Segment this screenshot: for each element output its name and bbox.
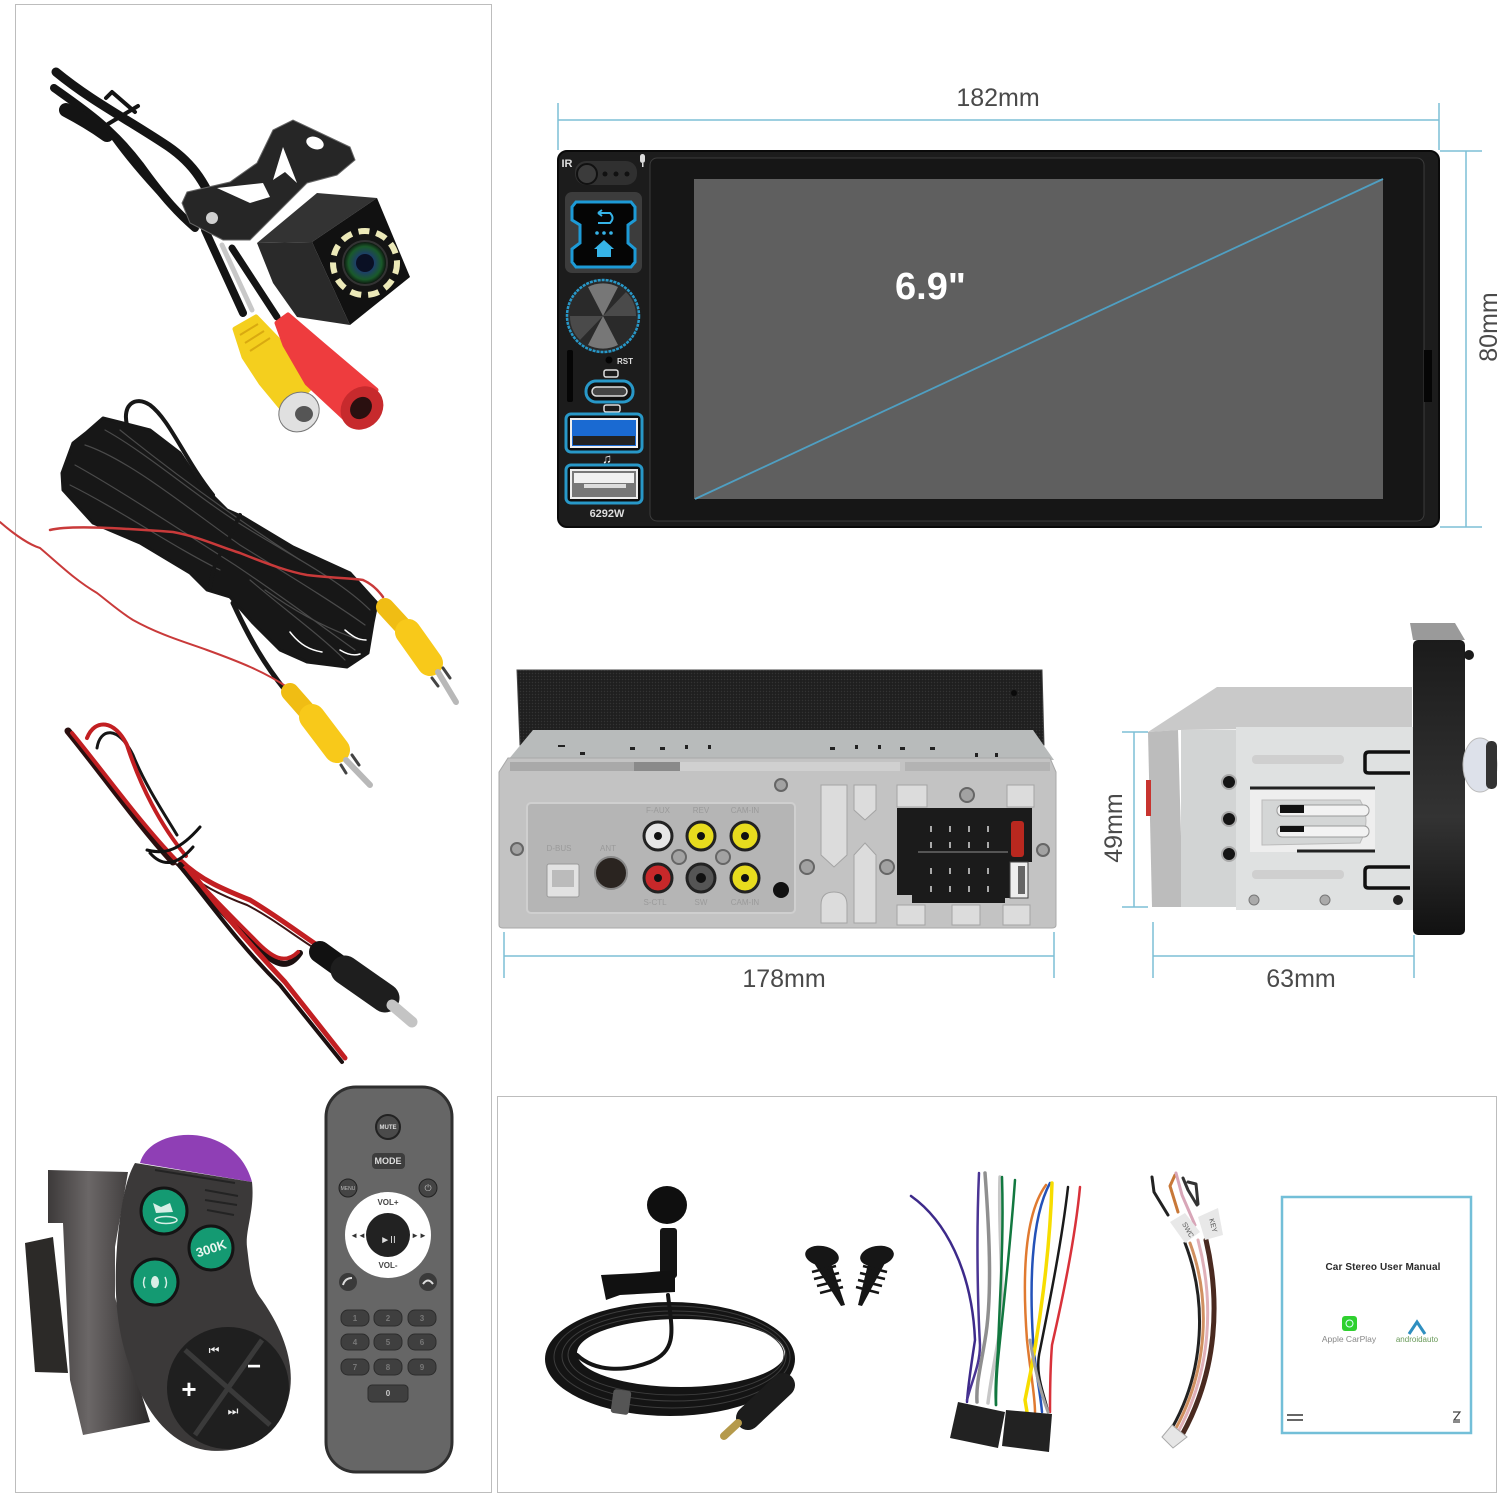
manual page [1282, 1197, 1471, 1433]
dimension: depth 63mm [1153, 922, 1414, 993]
number labels: 8 [386, 1363, 391, 1372]
black cutouts [1365, 752, 1410, 888]
number labels [353, 1314, 425, 1398]
DC barrel plug [320, 952, 412, 1022]
foam windscreen [647, 1186, 687, 1224]
control dial: + [181, 1374, 197, 1404]
wire tags: SWC [1180, 1221, 1194, 1239]
wire tags: KEY [1207, 1218, 1218, 1234]
power button [419, 1179, 437, 1197]
number labels: 1 [353, 1314, 358, 1323]
wire tags [1170, 1208, 1223, 1243]
panel: accessories bottom [498, 1096, 1496, 1492]
port labels: CAM-IN [731, 898, 759, 907]
top plate [508, 730, 1054, 760]
camera and LEDs [575, 161, 637, 185]
colored wires [911, 1173, 1080, 1412]
steering wheel remote [25, 1135, 291, 1451]
menu lines [1287, 1415, 1303, 1420]
camera bracket [182, 120, 355, 240]
port labels: CAM-IN [731, 806, 759, 815]
navigation ring: VOL+ [377, 1198, 399, 1207]
Android Auto logo [1396, 1322, 1439, 1344]
rear block [1148, 730, 1183, 907]
stereo rear view [499, 670, 1056, 928]
plug [1162, 1425, 1187, 1448]
dimension: depth 63mm: 63mm [1266, 965, 1336, 993]
faceplate button [1464, 650, 1474, 660]
RCA centers [654, 832, 749, 883]
recycling mark [1453, 1412, 1460, 1422]
screen diagonal [695, 179, 1383, 499]
red fuse [1011, 821, 1024, 857]
port labels [547, 806, 759, 907]
top surface [1148, 687, 1412, 732]
number pad [341, 1310, 436, 1402]
control dial: ⏮ [209, 1343, 220, 1357]
right edge notch [1424, 350, 1432, 402]
red DC plug [277, 315, 392, 438]
user manual [1282, 1197, 1471, 1433]
side plate [1236, 727, 1413, 910]
middle section [1181, 730, 1237, 907]
stereo front view [558, 151, 1439, 527]
port labels: REV [693, 806, 710, 815]
card slot [567, 350, 573, 402]
reset button [606, 356, 633, 366]
dimension: rear width 178mm: 178mm [742, 965, 826, 993]
camera extension cable [0, 401, 456, 785]
IR remote control [326, 1087, 452, 1472]
port icon top [604, 370, 618, 377]
mute button [376, 1115, 400, 1139]
coil strand lines [554, 1306, 790, 1408]
faceplate side [1410, 623, 1465, 640]
inner cable loop [577, 1295, 671, 1369]
vent slits [155, 1170, 238, 1215]
mute button: MUTE [380, 1125, 396, 1131]
red side tab [1146, 780, 1151, 816]
yellow RCA connectors [290, 607, 456, 785]
power button: ⏻ [424, 1183, 432, 1193]
USB-C port [586, 381, 633, 402]
mic coil [545, 1302, 795, 1416]
stereo side view [1146, 623, 1497, 935]
number labels: 0 [386, 1389, 391, 1398]
reset button: RST [617, 357, 633, 366]
panel: accessories left [16, 4, 492, 1492]
dimension: height 80mm [1440, 151, 1498, 527]
RCA sockets [644, 822, 759, 892]
microphone icon [640, 154, 645, 167]
number labels: 5 [386, 1338, 391, 1347]
mount clip [48, 1170, 150, 1435]
spring clip [1250, 788, 1375, 852]
dimension: width 182mm: 182mm [956, 84, 1040, 112]
display area [694, 179, 1383, 499]
dimension: height 49mm: 49mm [1100, 793, 1128, 863]
remote body [116, 1163, 291, 1451]
mic clip [601, 1270, 675, 1300]
screw left [804, 1243, 845, 1306]
mode button [372, 1153, 405, 1169]
camera housing [257, 193, 410, 325]
faceplate [558, 151, 1439, 527]
rear camera [54, 72, 410, 440]
number labels: 2 [386, 1314, 391, 1323]
blue USB port [566, 414, 642, 452]
green buttons [132, 1188, 233, 1305]
vent slots [821, 785, 1034, 925]
port labels: F-AUX [646, 806, 671, 815]
mounting screws [511, 779, 1049, 874]
CarPlay logo [1322, 1316, 1377, 1344]
wiring harness [911, 1173, 1080, 1452]
cable tie [610, 1389, 632, 1415]
mounting screws [804, 1243, 895, 1306]
faceplate edge [1413, 640, 1465, 935]
navigation ring: ►II [380, 1235, 396, 1246]
button glyphs [144, 1203, 177, 1288]
rear USB port [1010, 862, 1028, 898]
plate ribs [1252, 755, 1344, 879]
camera cables [54, 72, 277, 317]
sticker strip [510, 762, 1050, 771]
harness wires [1152, 1173, 1214, 1435]
black hole [773, 882, 789, 898]
dimension: width 182mm [558, 84, 1439, 150]
connector left [950, 1402, 1005, 1448]
number labels: 9 [420, 1363, 425, 1372]
mode button: MODE [374, 1156, 402, 1166]
port labels: ANT [600, 844, 616, 853]
yellow RCA plug [235, 317, 327, 440]
top loop and lead [126, 401, 285, 690]
screen size label: 6.9" [895, 266, 966, 308]
navigation ring: ◄◄ [350, 1231, 366, 1240]
mic hole [1011, 690, 1017, 696]
model number: 6292W [590, 508, 625, 520]
port labels: SW [695, 898, 708, 907]
rear body [499, 758, 1056, 928]
menu button: MENU [341, 1186, 356, 1192]
white USB port [566, 465, 642, 503]
connector right [1002, 1410, 1052, 1452]
call buttons [339, 1273, 437, 1291]
D-BUS connector [547, 864, 579, 897]
purple lens [140, 1135, 252, 1182]
strap [25, 1237, 68, 1373]
audio jack [724, 1385, 783, 1436]
mic tube [660, 1228, 677, 1278]
navigation ring: ►► [411, 1231, 427, 1240]
volume knob [567, 280, 639, 352]
control dial: ⏭ [228, 1404, 239, 1418]
white gaps [290, 630, 366, 655]
music note icon: ♫ [602, 451, 612, 466]
number labels: 4 [353, 1338, 358, 1347]
red trigger wire [0, 522, 383, 687]
remote body [326, 1087, 452, 1472]
manual title: Car Stereo User Manual [1325, 1262, 1441, 1273]
Android Auto logo: androidauto [1396, 1335, 1439, 1344]
control dial [167, 1327, 289, 1449]
antenna socket [595, 857, 627, 889]
IR label: IR [562, 158, 573, 170]
menu button [339, 1179, 357, 1197]
camera knob [1463, 738, 1497, 792]
port recess [527, 803, 795, 913]
twisted wire [68, 724, 345, 1062]
port labels: D-BUS [547, 844, 571, 853]
dimension: rear width 178mm [504, 932, 1054, 993]
screw right [856, 1243, 895, 1306]
number labels: 6 [420, 1338, 425, 1347]
bottom screws [1249, 895, 1403, 905]
dimension: height 49mm [1100, 732, 1148, 907]
cable strand highlights [70, 430, 370, 660]
navigation ring: VOL- [378, 1261, 398, 1270]
port icon bottom [604, 405, 620, 412]
navigation ring [345, 1192, 431, 1278]
control dial: − [247, 1353, 261, 1380]
screen bezel [650, 158, 1424, 521]
button label 300K: 300K [194, 1236, 229, 1260]
wiring socket [897, 808, 1032, 903]
number labels: 3 [420, 1314, 425, 1323]
top plate slots [558, 745, 998, 757]
home and back button [565, 192, 642, 273]
rear dark panel [517, 670, 1044, 745]
small harness [1152, 1173, 1223, 1448]
number labels: 7 [353, 1363, 358, 1372]
coiled wire mass [62, 418, 377, 667]
port labels: S-CTL [643, 898, 667, 907]
CarPlay logo: Apple CarPlay [1322, 1334, 1377, 1344]
side holes [1222, 775, 1236, 861]
power cable [68, 724, 412, 1062]
lapel microphone [545, 1186, 795, 1436]
